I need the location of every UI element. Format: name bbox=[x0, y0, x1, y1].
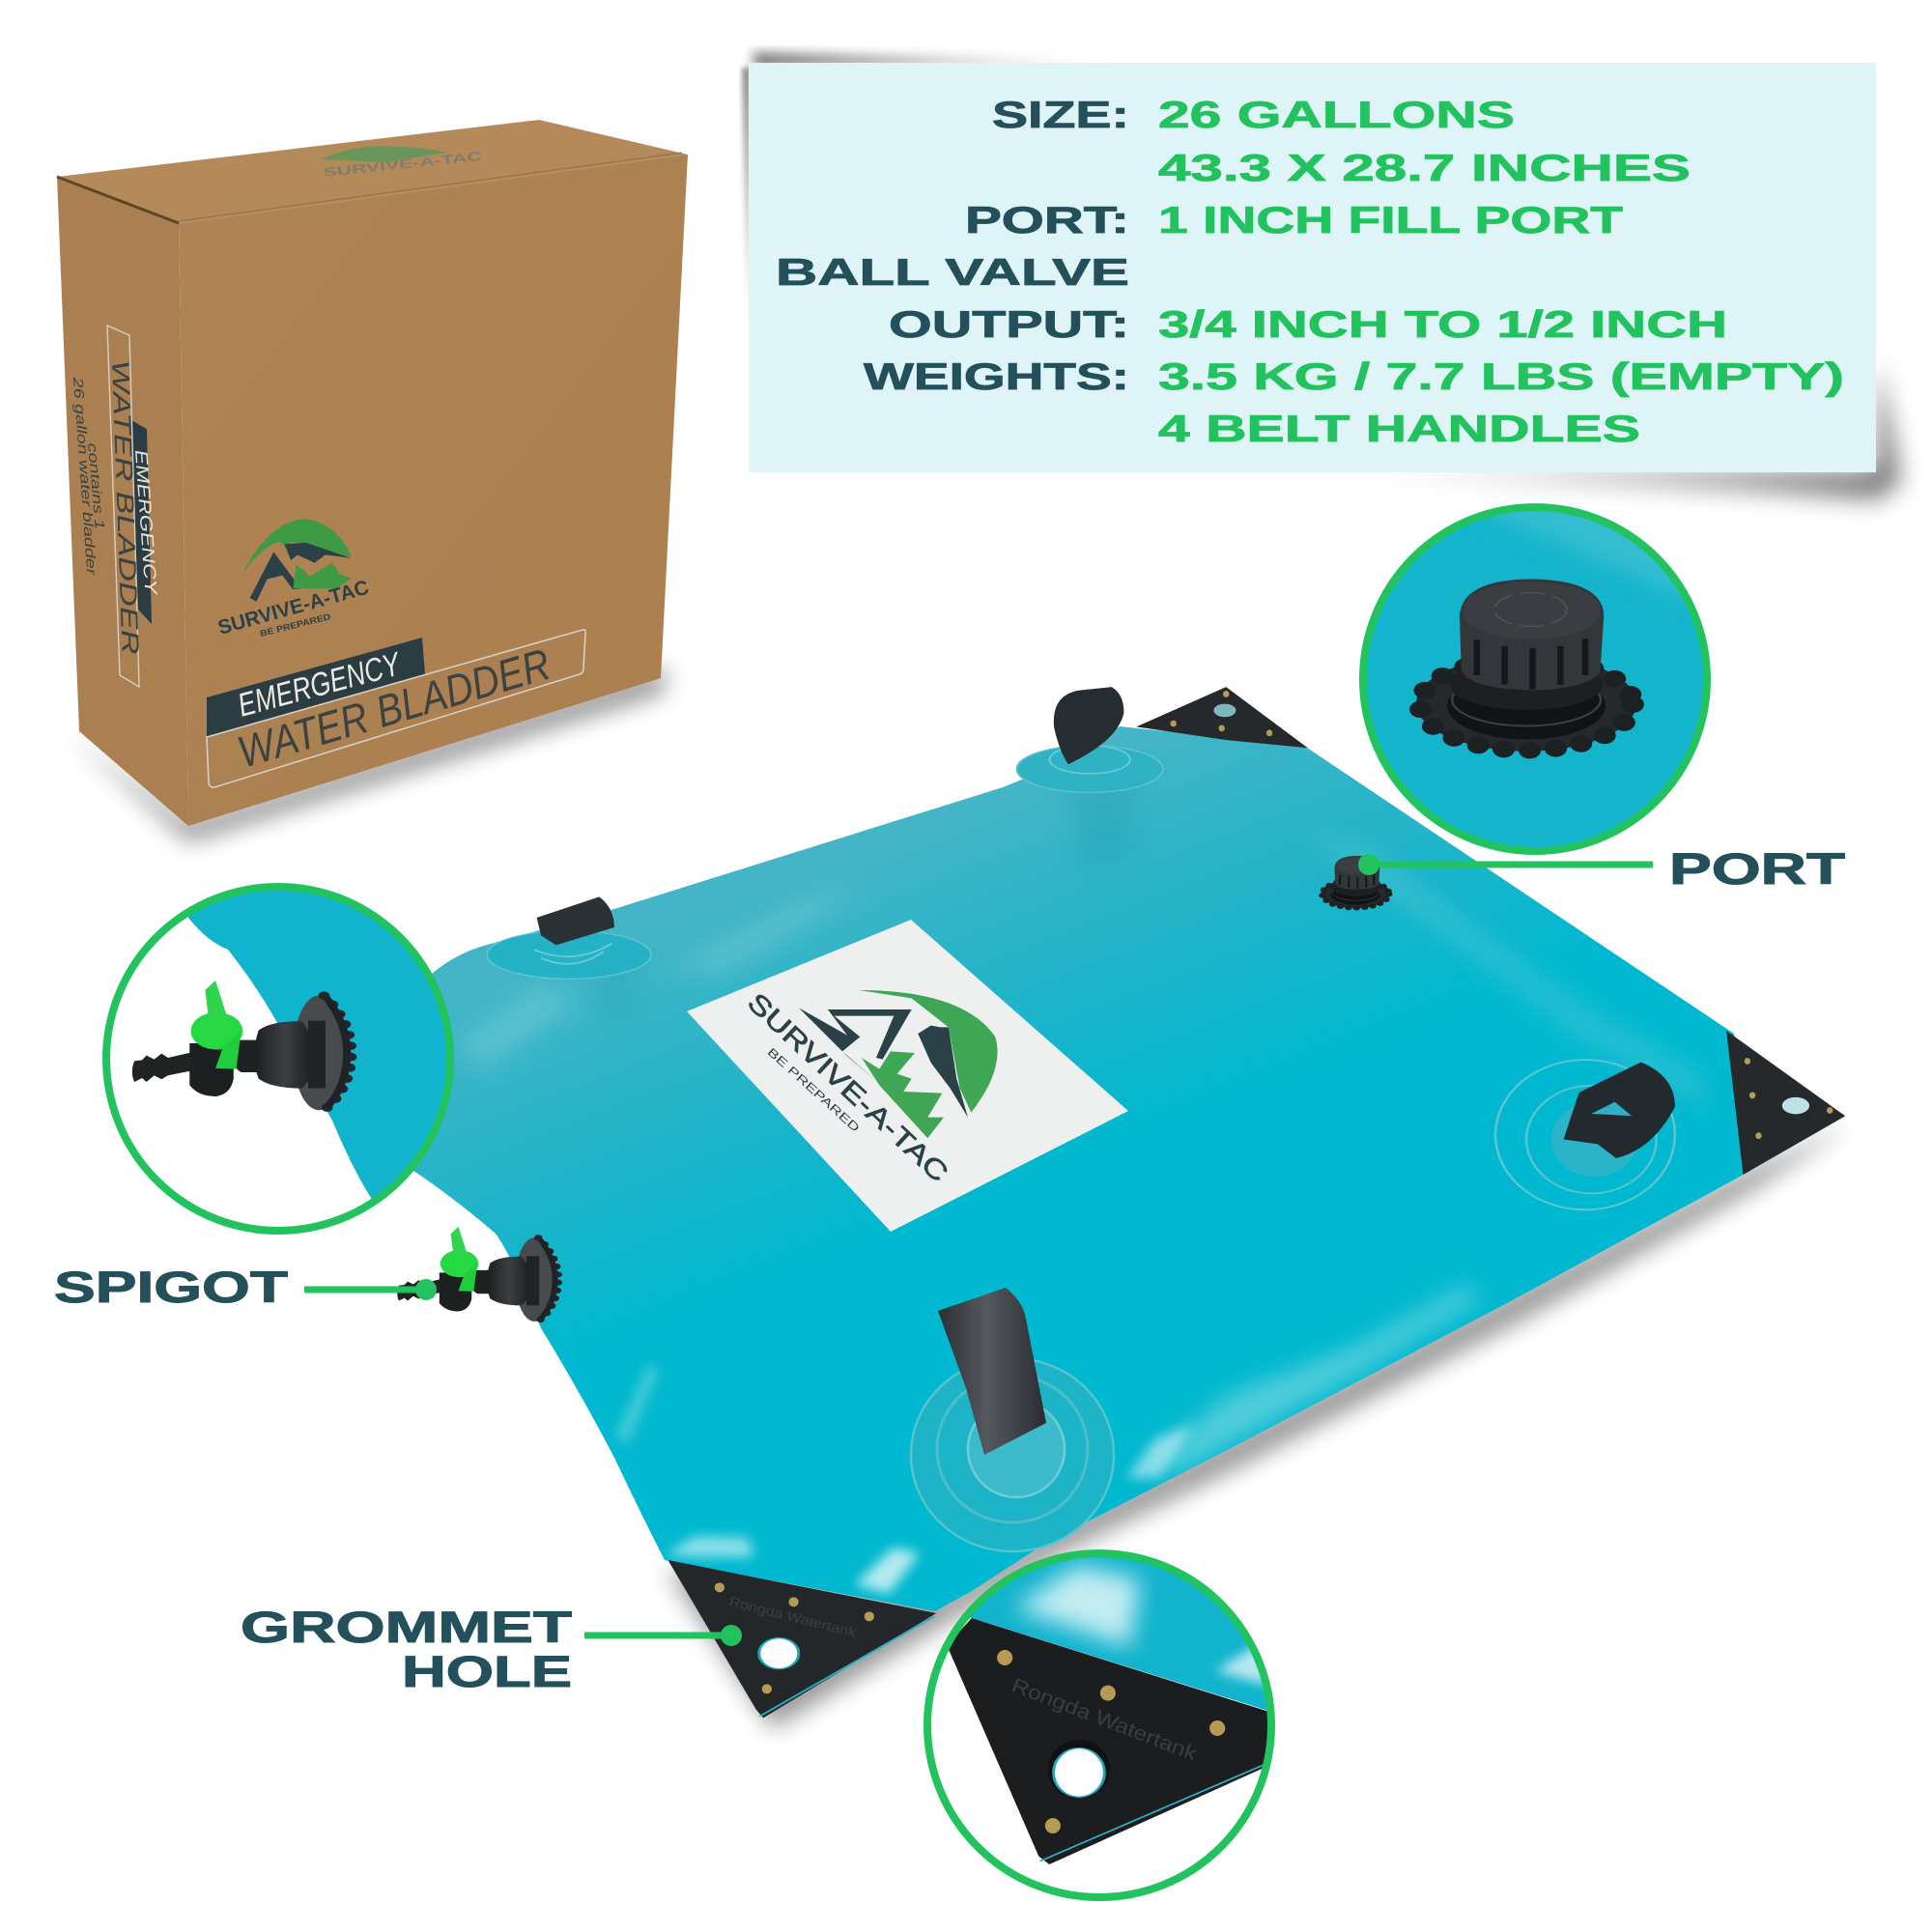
spec values: 26 GALLONS bbox=[1158, 95, 1515, 136]
box front logo bbox=[243, 519, 352, 602]
box logo wordmark: BE PREPARED bbox=[259, 611, 332, 639]
callout: grommet hole: HOLE bbox=[402, 1647, 572, 1696]
box top logo: SURVIVE-A-TAC bbox=[323, 149, 483, 180]
box left face bbox=[57, 177, 188, 826]
callout: grommet hole: GROMMET bbox=[241, 1603, 572, 1652]
grommet detail lens: Rongda Watertank bbox=[1009, 1674, 1200, 1766]
spec values: 4 BELT HANDLES bbox=[1158, 409, 1640, 450]
callout: spigot bbox=[54, 1263, 437, 1312]
box side label: contains 1 bbox=[85, 442, 108, 530]
spec values: 43.3 X 28.7 INCHES bbox=[1158, 148, 1690, 189]
bladder highlights bbox=[454, 763, 1710, 1594]
sticker logo: BE PREPARED bbox=[765, 1045, 863, 1135]
box logo wordmark: SURVIVE-A-TAC bbox=[215, 577, 371, 639]
box top face bbox=[57, 120, 688, 223]
box front label: EMERGENCY bbox=[234, 645, 406, 724]
sticker logo: SURVIVE-A-TAC bbox=[742, 987, 954, 1188]
spec labels: OUTPUT: bbox=[889, 304, 1129, 346]
water bladder: Rongda Watertank bbox=[727, 1593, 859, 1640]
grommet detail lens bbox=[923, 1549, 1275, 1901]
handle: top bbox=[1017, 687, 1163, 792]
callout: port: PORT bbox=[1669, 844, 1845, 894]
spec labels: BALL VALVE bbox=[776, 252, 1129, 294]
product box bbox=[57, 120, 688, 826]
sticker bbox=[687, 920, 1128, 1232]
spec labels: PORT: bbox=[965, 200, 1129, 242]
spec values: 1 INCH FILL PORT bbox=[1158, 200, 1624, 242]
box front face bbox=[179, 155, 688, 826]
box front label: WATER BLADDER bbox=[232, 639, 555, 778]
panel shadow bbox=[742, 52, 1901, 500]
spec labels: WEIGHTS: bbox=[864, 356, 1129, 398]
corner plate: bottom bbox=[668, 1560, 936, 1718]
water bladder bbox=[397, 687, 1845, 1718]
box side label: EMERGENCY bbox=[131, 449, 161, 597]
callout: grommet hole bbox=[241, 1603, 742, 1696]
spec panel bbox=[749, 63, 1876, 472]
spec labels bbox=[776, 95, 1129, 398]
shadow: box bbox=[70, 667, 667, 842]
sticker logo bbox=[742, 987, 998, 1188]
callout: port bbox=[1358, 844, 1845, 894]
spec values: 3/4 INCH TO 1/2 INCH bbox=[1158, 304, 1727, 346]
spec labels: SIZE: bbox=[992, 95, 1129, 136]
handle: right bbox=[1495, 1060, 1675, 1209]
handle: bottom bbox=[911, 1288, 1114, 1551]
box side label bbox=[71, 326, 161, 687]
bladder body bbox=[406, 726, 1750, 1611]
box side label: 26 gallon water bladder bbox=[71, 376, 99, 578]
spigot detail lens bbox=[102, 883, 454, 1235]
port detail lens bbox=[1363, 493, 1729, 851]
spec values: 3.5 KG / 7.7 LBS (EMPTY) bbox=[1158, 356, 1844, 398]
handle: left bbox=[487, 896, 651, 979]
spec values bbox=[1158, 95, 1844, 450]
spigot fitting bbox=[397, 1227, 558, 1321]
port fitting bbox=[1321, 856, 1390, 908]
corner plate: right bbox=[1726, 1031, 1845, 1175]
box top logo bbox=[321, 146, 483, 180]
callout: spigot: SPIGOT bbox=[54, 1263, 288, 1312]
bladder shadow bbox=[667, 1125, 1850, 1729]
corner plate: top bbox=[1136, 687, 1308, 748]
box side label: WATER BLADDER bbox=[106, 359, 144, 655]
